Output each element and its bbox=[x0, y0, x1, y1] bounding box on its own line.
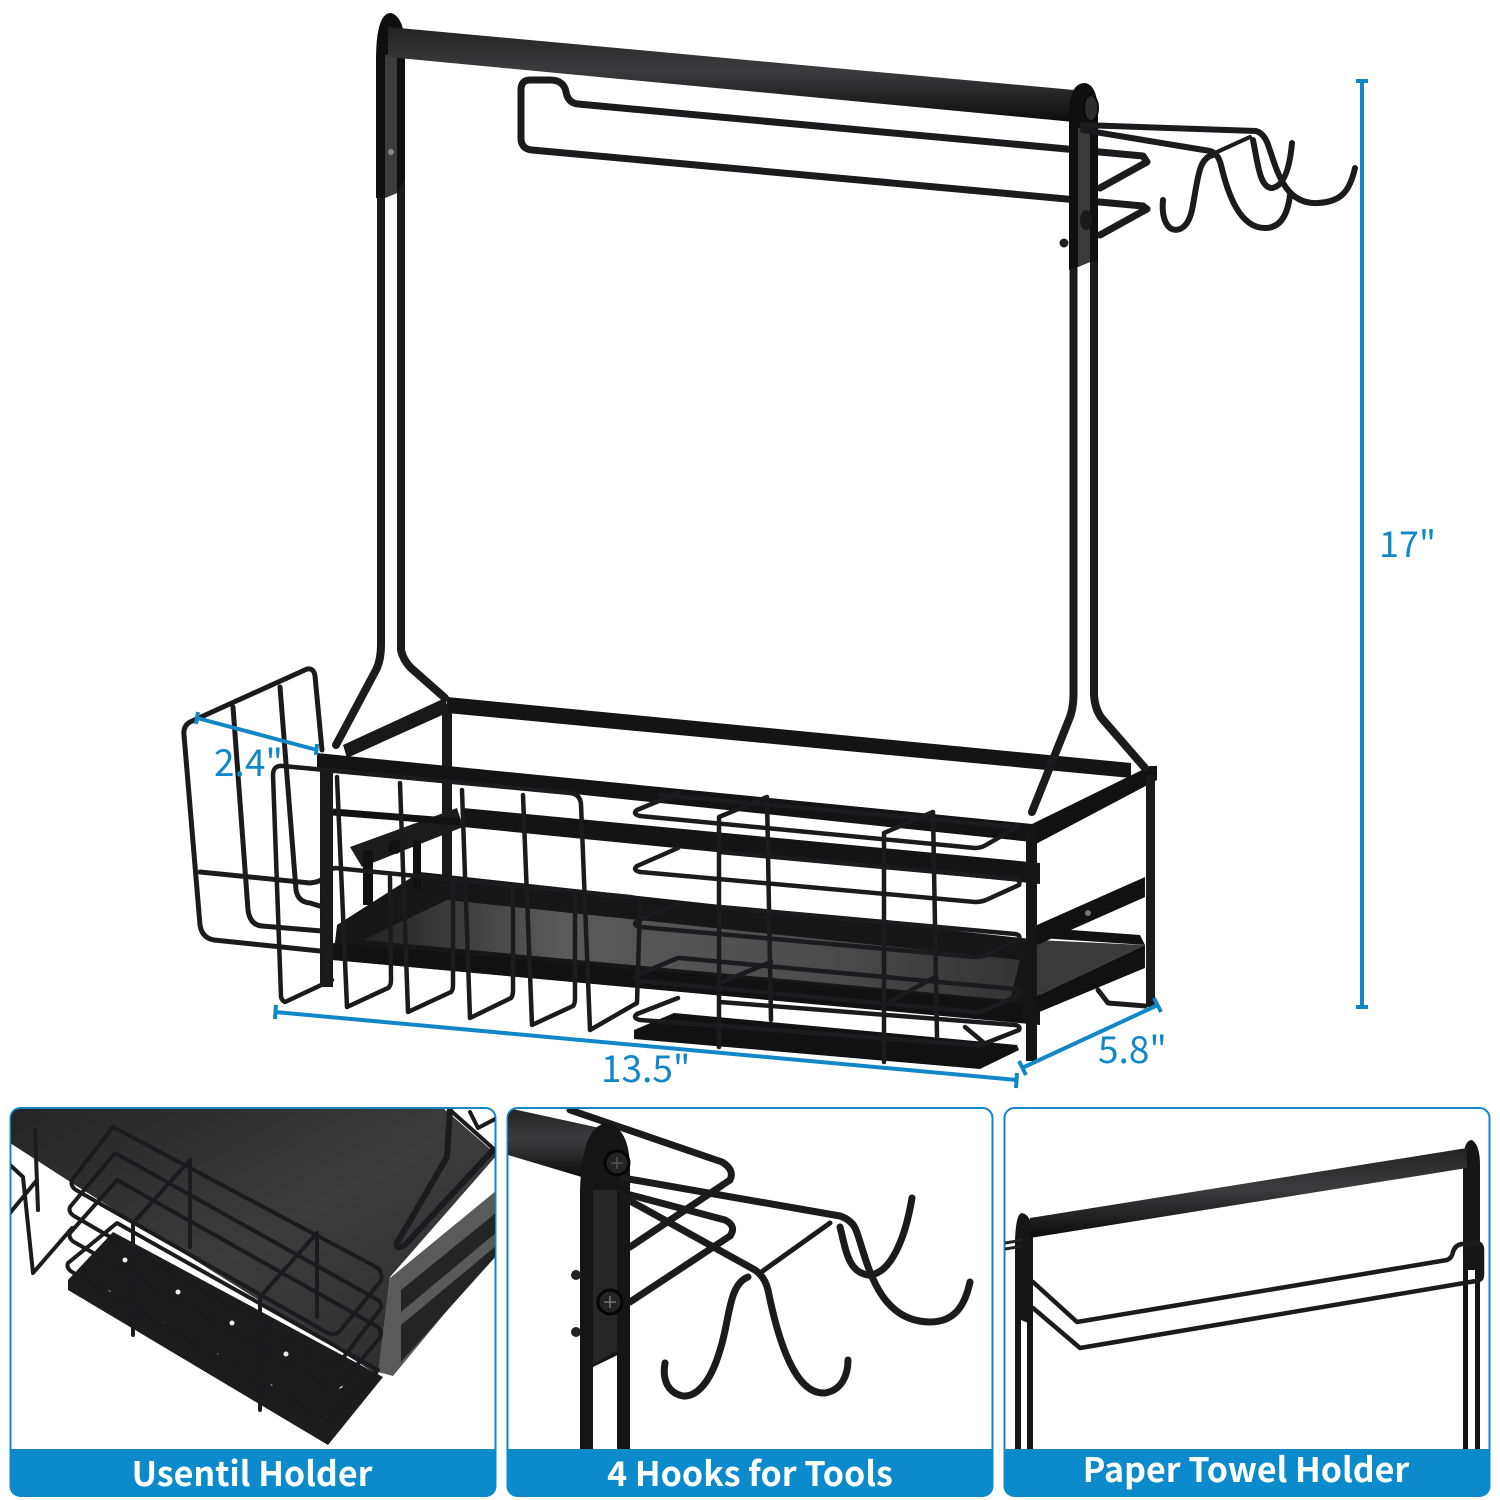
dimension: basket 2.4 inches: 2.4" bbox=[214, 733, 283, 787]
right post and legs bbox=[1032, 255, 1145, 812]
dimension: height 17 inches: 17" bbox=[1379, 516, 1436, 568]
bottom tray bbox=[333, 872, 1145, 1025]
four hooks bbox=[1082, 125, 1355, 230]
right wire basket bbox=[635, 793, 1020, 1062]
label bar bbox=[1004, 1449, 1490, 1496]
label bar bbox=[10, 1449, 496, 1496]
middle back rail bbox=[463, 808, 1040, 884]
caption: 4 Hooks for Tools bbox=[607, 1447, 893, 1496]
photo: utensil basket close-up bbox=[10, 1108, 497, 1445]
label bar bbox=[507, 1449, 993, 1496]
caption: Usentil Holder bbox=[132, 1447, 373, 1496]
left side frame and brace bbox=[320, 698, 463, 987]
right end frame bbox=[1026, 766, 1157, 1061]
panel: four hooks bbox=[507, 1108, 993, 1496]
main rack product illustration bbox=[184, 13, 1355, 1069]
left wire utensil basket bbox=[184, 669, 323, 951]
bottom drip tray bbox=[634, 1013, 1019, 1069]
front wire divider basket bbox=[273, 766, 640, 1030]
dimension: depth 5.8 inches: 5.8" bbox=[1098, 1020, 1167, 1074]
photo: hooks close-up bbox=[508, 1108, 970, 1452]
dimension: width 13.5 inches: 13.5" bbox=[601, 1039, 690, 1093]
photo: towel bar close-up bbox=[1005, 1140, 1482, 1450]
paper towel holder wire bbox=[521, 80, 1147, 235]
dimension: width 13.5 inches bbox=[275, 1005, 1017, 1093]
right plate bbox=[1060, 83, 1098, 270]
left post and legs bbox=[336, 13, 445, 745]
dimension: basket 2.4 inches bbox=[196, 712, 317, 787]
back top rail bbox=[447, 697, 1131, 778]
dimension: depth 5.8 inches bbox=[1019, 998, 1167, 1075]
caption: Paper Towel Holder bbox=[1083, 1443, 1409, 1492]
dimension: height 17 inches bbox=[1356, 81, 1436, 1007]
panel: utensil holder bbox=[10, 1108, 497, 1496]
top roller bar bbox=[388, 27, 1074, 122]
front top rail bbox=[317, 753, 1032, 842]
panel: paper towel holder bbox=[1004, 1108, 1490, 1496]
